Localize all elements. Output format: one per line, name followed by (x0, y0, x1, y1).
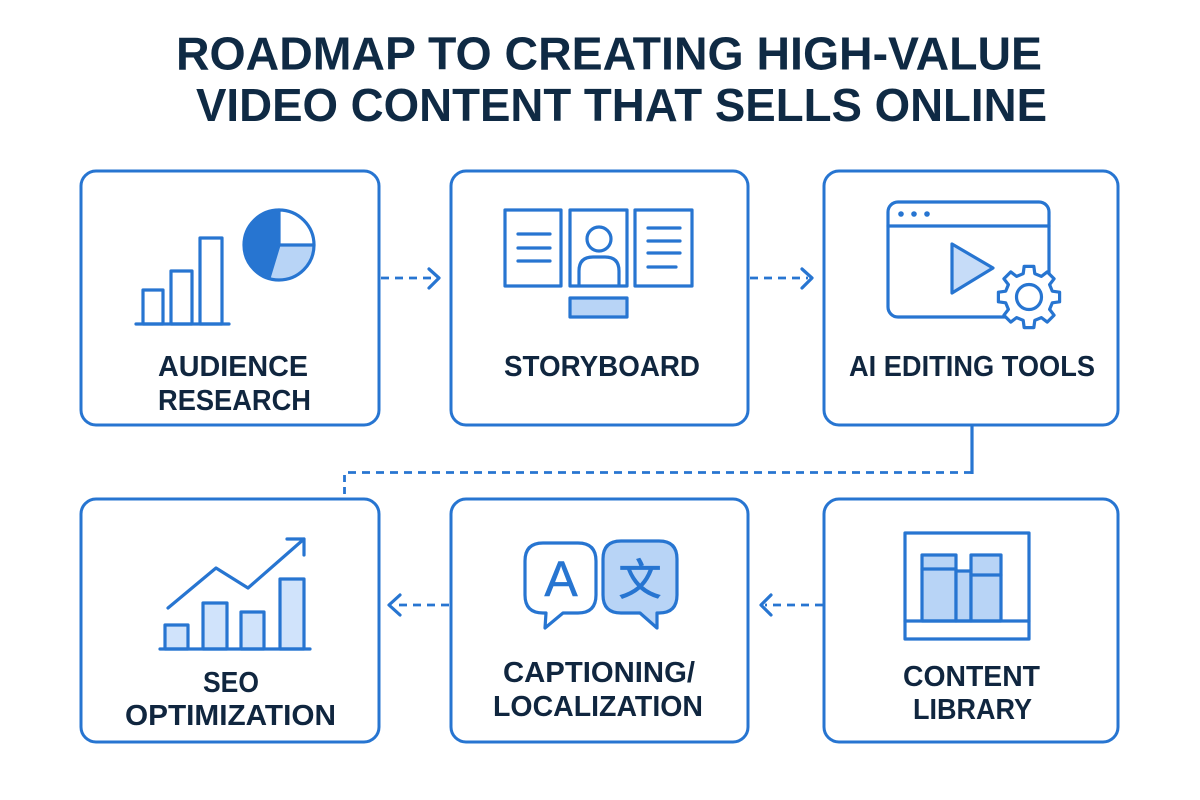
arrow: AI tools down and across to SEO (344, 425, 972, 498)
label (125, 667, 336, 732)
label: AI EDITING TOOLS (849, 351, 1095, 383)
icon: translation bubbles: 文 (618, 546, 662, 608)
label: RESEARCH (158, 385, 311, 417)
label: CONTENT (903, 661, 1040, 693)
label: LOCALIZATION (493, 691, 703, 723)
label: CAPTIONING/ (503, 657, 695, 689)
label (903, 661, 1040, 726)
icon: growth chart (160, 539, 310, 649)
icon: storyboard frames (505, 210, 692, 317)
panel: captioning and localization (451, 499, 748, 742)
panel: audience research (81, 171, 379, 425)
icon: translation bubbles (525, 541, 677, 628)
panel: SEO optimization (81, 499, 379, 742)
label: LIBRARY (913, 694, 1032, 726)
icon: pie chart (244, 210, 314, 280)
icon: bookshelf (905, 533, 1029, 639)
panel: content library (824, 499, 1118, 742)
label: AUDIENCE (158, 351, 308, 383)
arrow: library to captioning (761, 595, 823, 615)
label: SEO (203, 667, 259, 699)
title (176, 28, 1047, 131)
icon: translation bubbles: A (544, 551, 578, 607)
label (158, 351, 311, 417)
panel: storyboard (451, 171, 748, 425)
icon: bar chart (136, 238, 229, 324)
label (493, 657, 703, 723)
title: VIDEO CONTENT THAT SELLS ONLINE (196, 79, 1047, 131)
title: ROADMAP TO CREATING HIGH-VALUE (176, 28, 1042, 80)
label: STORYBOARD (504, 351, 700, 383)
arrow: research to storyboard (381, 269, 439, 288)
panel: AI editing tools (824, 171, 1118, 425)
arrow: captioning to SEO (389, 595, 449, 615)
icon: video window with gear (888, 202, 1060, 328)
label: OPTIMIZATION (125, 700, 336, 732)
arrow: storyboard to AI tools (750, 269, 812, 288)
